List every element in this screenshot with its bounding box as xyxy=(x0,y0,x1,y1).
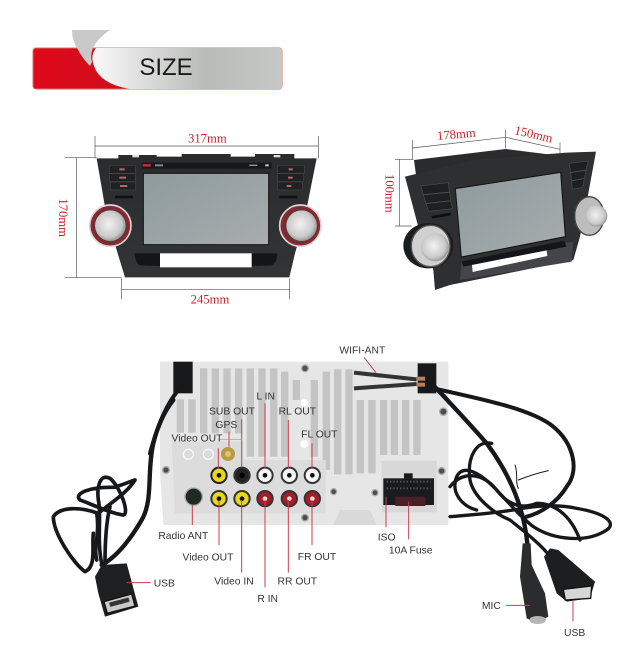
slot xyxy=(472,250,547,272)
white holes xyxy=(300,399,308,448)
top strip xyxy=(142,163,272,169)
heading: SIZE: SIZE xyxy=(139,54,193,81)
MIC plug xyxy=(520,543,548,624)
left knob xyxy=(90,205,131,246)
label: 317mm: 317mm xyxy=(188,131,227,145)
angled view radio with dimensions xyxy=(383,123,607,290)
connector plate xyxy=(172,442,326,513)
banner: SIZE xyxy=(33,30,282,89)
labels: WIFI-ANT xyxy=(339,346,386,357)
mounting tabs xyxy=(132,155,280,157)
embossed circles xyxy=(183,449,213,459)
label: 150mm: 150mm xyxy=(513,123,554,146)
slot xyxy=(160,253,252,267)
labels xyxy=(158,346,433,605)
RCA jacks xyxy=(211,468,320,506)
labels: Video OUT xyxy=(183,553,234,564)
labels: L IN xyxy=(256,391,275,402)
left USB cable xyxy=(53,400,175,617)
label: 170mm: 170mm xyxy=(56,198,70,237)
labels: FR OUT xyxy=(298,552,337,563)
labels: FL OUT xyxy=(301,429,338,440)
right cables, MIC and USB xyxy=(428,380,610,639)
cables xyxy=(428,380,610,557)
radio bezel xyxy=(97,154,317,277)
ISO connector xyxy=(383,473,434,506)
right knob xyxy=(280,205,321,246)
label: 178mm: 178mm xyxy=(436,126,476,143)
label: 245mm: 245mm xyxy=(191,292,229,306)
button groups xyxy=(421,161,588,211)
pointers xyxy=(506,600,573,621)
mounting holes xyxy=(163,365,447,521)
dimension lines xyxy=(395,130,560,226)
pointer lines xyxy=(192,357,409,587)
USB plug xyxy=(95,563,138,617)
button groups xyxy=(109,165,304,190)
dimension lines xyxy=(65,136,318,299)
corner brackets xyxy=(173,362,436,393)
radio antenna socket xyxy=(185,488,202,505)
rear panel with connectors xyxy=(150,346,450,605)
screen xyxy=(455,172,565,257)
label: USB: USB xyxy=(564,628,585,639)
labels: RR OUT xyxy=(278,577,318,588)
button marks xyxy=(119,168,293,187)
labels: Video IN xyxy=(214,577,254,588)
labels: Radio ANT xyxy=(158,531,209,542)
front view radio with dimensions xyxy=(56,131,321,306)
label: 100mm: 100mm xyxy=(383,174,397,213)
USB plug xyxy=(544,548,595,602)
GPS gold connector xyxy=(221,447,235,461)
lower opening xyxy=(135,253,277,266)
label: MIC: MIC xyxy=(482,601,501,612)
labels: RL OUT xyxy=(279,407,317,418)
labels: ISO xyxy=(378,532,396,543)
left knob xyxy=(403,223,453,268)
bezel xyxy=(405,152,596,290)
labels: SUB OUT xyxy=(209,407,256,418)
panel body xyxy=(160,362,448,525)
labels: GPS xyxy=(215,420,237,431)
labels: Video OUT xyxy=(172,434,223,445)
vent slots xyxy=(177,368,421,474)
cables leaving the brackets xyxy=(150,382,450,453)
lower trapezoid xyxy=(333,510,377,525)
card slots xyxy=(115,196,297,198)
lower opening xyxy=(460,242,573,280)
right knob xyxy=(575,197,607,235)
label: USB: USB xyxy=(154,578,175,589)
labels: R IN xyxy=(257,594,278,605)
pointer xyxy=(127,581,151,584)
cable coil xyxy=(53,400,173,572)
card slot xyxy=(431,213,451,219)
labels: 10A Fuse xyxy=(389,546,433,557)
ISO plate xyxy=(382,461,437,512)
screen xyxy=(143,173,269,245)
chassis xyxy=(414,149,553,180)
WIFI antenna xyxy=(354,373,425,388)
